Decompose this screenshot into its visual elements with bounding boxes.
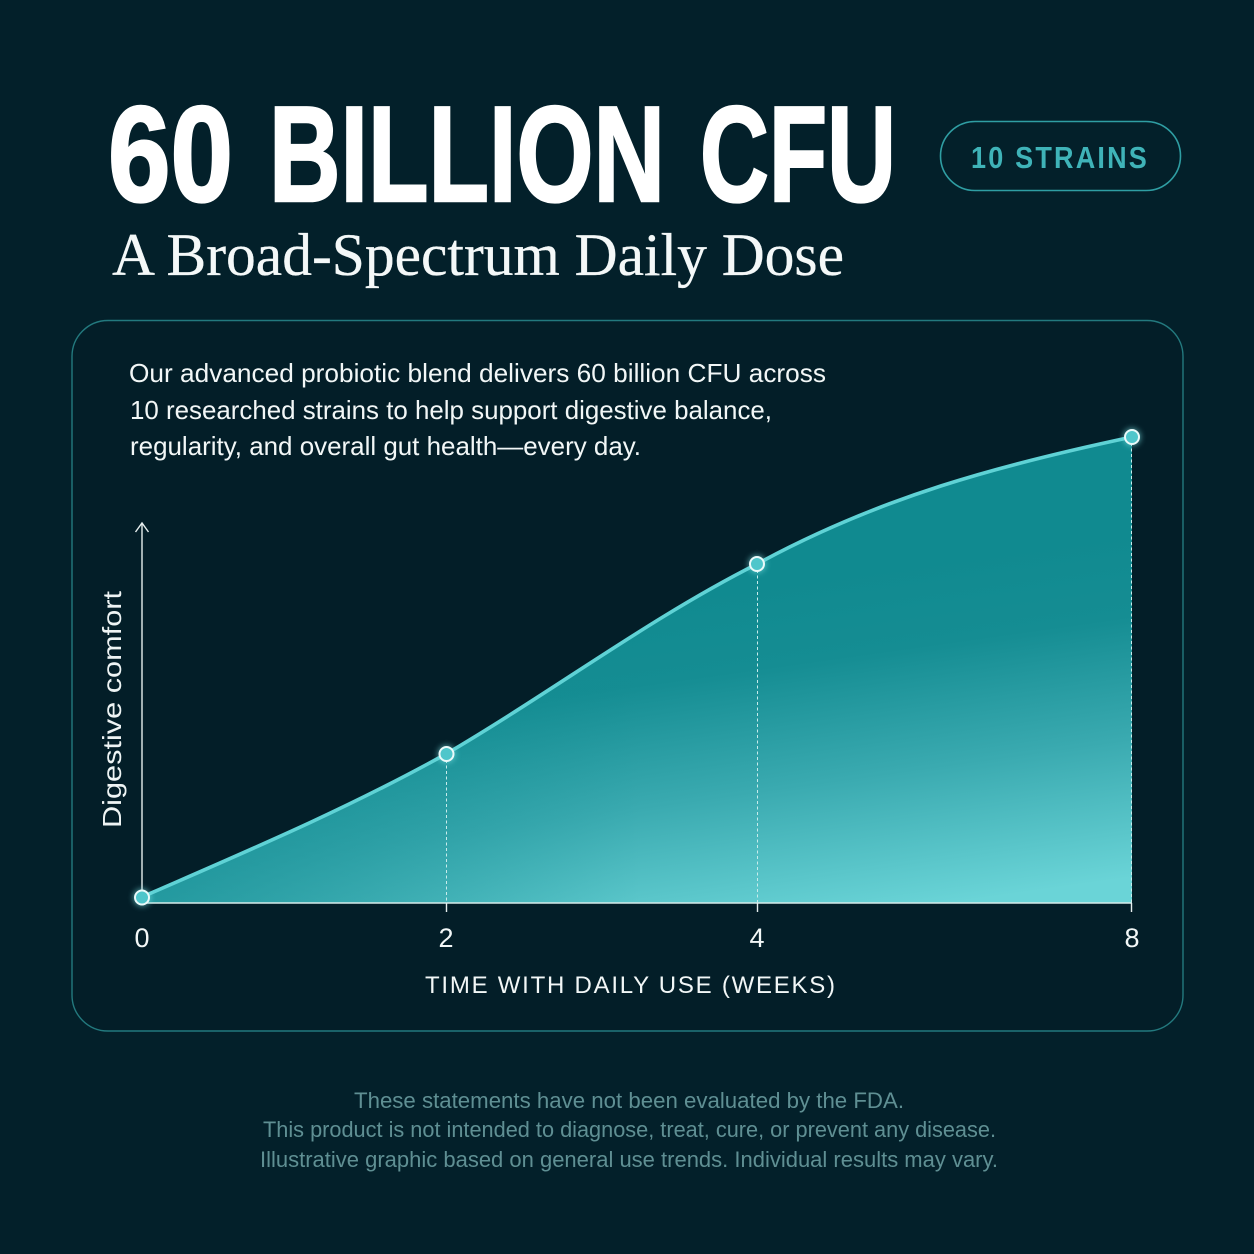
- title: CFU: [700, 78, 896, 230]
- title: [108, 78, 896, 230]
- x axis title: TIME WITH DAILY USE (WEEKS): [425, 972, 835, 999]
- description text: [129, 358, 826, 461]
- area fill: [142, 437, 1132, 903]
- subtitle: A Broad-Spectrum Daily Dose: [112, 222, 844, 288]
- description text: 10 researched strains to help support digestive balance,: [130, 395, 772, 425]
- badge: 10 strains: 10 STRAINS: [971, 140, 1149, 175]
- panel: chart card: [72, 320, 1183, 1031]
- data points: [133, 428, 1141, 906]
- badge: 10 strains: [940, 122, 1180, 190]
- footer disclaimer: This product is not intended to diagnose, treat, cure, or prevent any disease.: [263, 1117, 996, 1142]
- y axis label: Digestive comfort: [97, 590, 127, 828]
- footer disclaimer: Illustrative graphic based on general use trends. Individual results may vary.: [260, 1147, 998, 1172]
- x axis baseline: [142, 902, 1132, 904]
- description text: Our advanced probiotic blend delivers 60 billion CFU across: [129, 358, 826, 388]
- footer disclaimer: [260, 1088, 998, 1172]
- title: 60: [108, 78, 233, 230]
- x axis numbers: 8: [1124, 923, 1140, 953]
- drop lines: [446, 443, 1132, 903]
- title: BILLION: [269, 78, 665, 230]
- x axis numbers: [134, 923, 1140, 953]
- x axis ticks: [446, 903, 1132, 912]
- area chart: [97, 428, 1141, 999]
- trend line: [142, 437, 1132, 897]
- footer disclaimer: These statements have not been evaluated by the FDA.: [354, 1088, 904, 1113]
- y axis arrow: [136, 523, 148, 897]
- description text: regularity, and overall gut health—every day.: [130, 431, 641, 461]
- x axis numbers: 2: [438, 923, 454, 953]
- x axis numbers: 4: [749, 923, 765, 953]
- x axis numbers: 0: [134, 923, 150, 953]
